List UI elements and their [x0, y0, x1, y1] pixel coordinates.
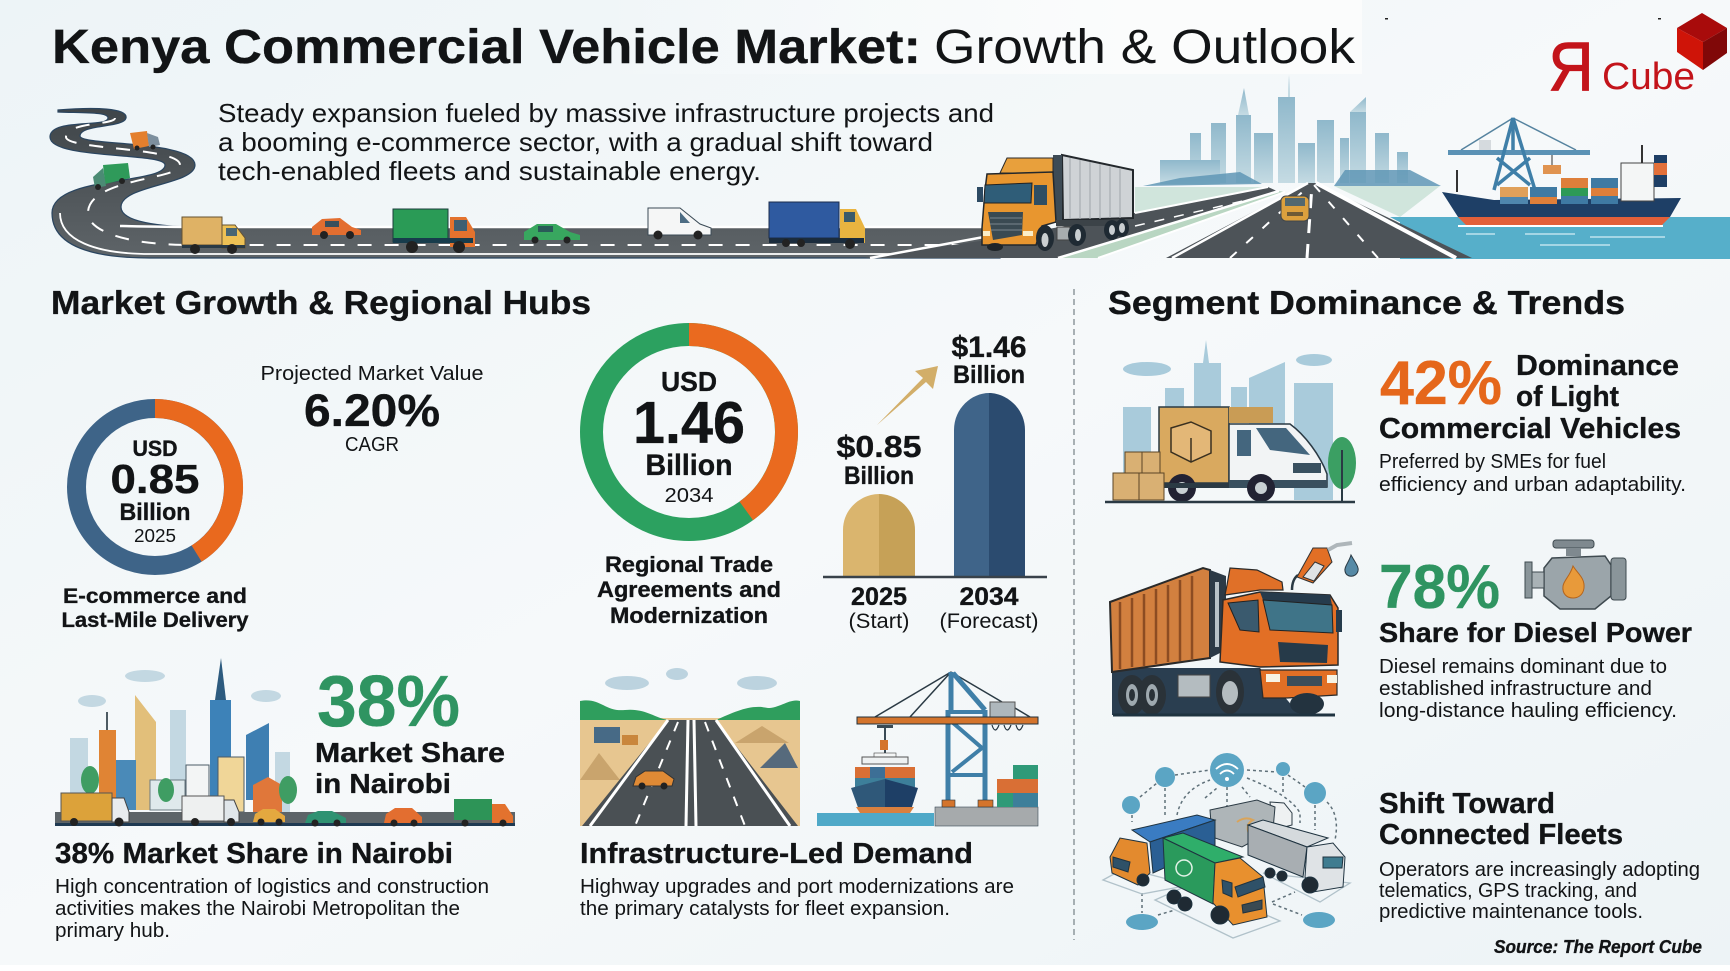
stat: 6.20% CAGR: 6.20%: [304, 385, 440, 436]
bar chart: 2025 vs 2034: (Forecast): [940, 610, 1038, 633]
label: Regional trade driver: Regional Trade: [605, 552, 773, 577]
stat: 78% diesel power: long-distance hauling efficiency.: [1379, 700, 1677, 722]
heading: Segment Dominance & Trends: Segment Dominance & Trends: [1108, 284, 1625, 321]
bar chart: 2025 vs 2034: (Start): [848, 610, 910, 633]
icon: diesel truck with fuel nozzle: [1110, 543, 1358, 715]
vehicle: green truck: [393, 209, 475, 253]
bar chart: 2025 vs 2034: 2034: [960, 583, 1019, 611]
stat: 42% light commercial vehicles: 42%: [1380, 349, 1502, 418]
left winding road: [50, 109, 1000, 258]
small yellow car: [1281, 196, 1309, 221]
label: E-commerce driver: [62, 585, 249, 632]
heading: Market Growth & Regional Hubs: Market Growth & Regional Hubs: [51, 284, 591, 321]
stat: 38% market share in Nairobi: 38%: [317, 662, 460, 742]
text block: Infrastructure-led demand: Infrastructure-Led Demand: [580, 838, 973, 870]
text block: connected fleets: [1379, 788, 1700, 923]
text block: Nairobi hub: 38% Market Share in Nairobi: [55, 838, 453, 870]
vehicle: tan box truck: [182, 217, 245, 254]
bar chart: 2025 vs 2034: $1.46: [952, 331, 1026, 364]
text block: Nairobi hub: High concentration of logistics and construction: [55, 876, 489, 898]
text block: Infrastructure-led demand: the primary catalysts for fleet expansion.: [580, 898, 950, 920]
donut: USD 0.85 Billion 2025: [76, 408, 234, 566]
subtitle text: a booming e-commerce sector, with a gradual shift toward: [218, 127, 933, 157]
vehicle: white van: [648, 208, 711, 240]
stat: 42% light commercial vehicles: efficiency and urban adaptability.: [1379, 474, 1686, 496]
cargo ship and crane: [1442, 118, 1681, 227]
donut: USD 1.46 Billion 2034: 2034: [664, 485, 714, 507]
stat: 42% light commercial vehicles: Dominance: [1516, 350, 1679, 382]
title: Kenya Commercial Vehicle Market:: [52, 21, 921, 74]
text block: Infrastructure-led demand: Highway upgrades and port modernizations are: [580, 876, 1014, 898]
stat: 38% market share in Nairobi: [315, 662, 505, 799]
skyline: [1143, 75, 1441, 186]
subtitle text: Steady expansion fueled by massive infrastructure projects and: [218, 98, 994, 128]
stat: 78% diesel power: Share for Diesel Power: [1379, 617, 1692, 648]
stat: 6.20% CAGR: Projected Market Value: [260, 363, 484, 385]
icon: engine with flame: [1525, 540, 1626, 609]
text block: connected fleets: telematics, GPS tracking, and: [1379, 880, 1637, 902]
label: E-commerce driver: E-commerce and: [63, 585, 247, 608]
label: Regional trade driver: Modernization: [610, 603, 768, 628]
stat: 78% diesel power: [1379, 553, 1692, 722]
ship wave lines: [1466, 234, 1665, 245]
arrow: growth: [877, 366, 938, 425]
text block: Nairobi hub: [55, 838, 489, 942]
donut: USD 1.46 Billion 2034: Billion: [646, 449, 732, 482]
stat: 42% light commercial vehicles: Commercial Vehicles: [1379, 413, 1681, 445]
label: Regional trade driver: [597, 552, 781, 628]
right highways: [865, 183, 1472, 258]
text block: Nairobi hub: primary hub.: [55, 920, 170, 942]
label: E-commerce driver: Last-Mile Delivery: [62, 609, 249, 632]
label: Regional trade driver: Agreements and: [597, 577, 781, 602]
vehicle: orange car: [312, 218, 361, 239]
back silver truck: [1210, 800, 1292, 847]
green truck: [1163, 833, 1267, 925]
banner: road, vehicles, skyline and port: [50, 75, 1730, 259]
donut: USD 0.85 Billion 2025: USD: [132, 436, 178, 461]
stat: 38% market share in Nairobi: Market Share: [315, 737, 505, 768]
bar chart: 2025 vs 2034: Billion: [844, 462, 914, 490]
icon: connected fleet: [1103, 753, 1350, 938]
stat: 78% diesel power: 78%: [1379, 553, 1500, 622]
donut: USD 1.46 Billion 2034: 1.46: [633, 390, 745, 456]
donut: USD 0.85 Billion 2025: Billion: [120, 499, 190, 526]
donut: USD 1.46 Billion 2034: USD: [661, 366, 717, 397]
vehicle: road orange truck: [130, 131, 160, 150]
icon: highway construction: [580, 668, 800, 826]
vehicle: green car: [524, 224, 580, 244]
bar chart: 2025 vs 2034: $0.85: [836, 429, 922, 464]
title: [52, 21, 1356, 74]
logo: RCube: Я: [1548, 28, 1594, 105]
text block: connected fleets: predictive maintenance tools.: [1379, 901, 1643, 923]
bar chart: 2025 vs 2034: 2025: [851, 583, 907, 611]
logo: RCube: Cube: [1602, 56, 1695, 98]
text block: connected fleets: Operators are increasingly adopting: [1379, 859, 1700, 881]
title: Growth & Outlook: [934, 21, 1356, 74]
text block: connected fleets: Connected Fleets: [1379, 819, 1623, 851]
icon: Nairobi city and traffic: [55, 658, 515, 826]
donut: USD 0.85 Billion 2025: 2025: [134, 526, 176, 546]
text block: Nairobi hub: activities makes the Nairobi Metropolitan the: [55, 898, 460, 920]
silver front truck: [1248, 820, 1345, 893]
bar chart: 2025 vs 2034: Billion: [953, 361, 1025, 389]
stat: 6.20% CAGR: CAGR: [345, 434, 399, 456]
icon: light commercial vehicle: [1105, 340, 1356, 502]
subtitle text: tech-enabled fleets and sustainable energy.: [218, 156, 761, 186]
stat: 38% market share in Nairobi: in Nairobi: [315, 768, 451, 799]
icon: port crane and ship: [817, 672, 1038, 826]
stat: 42% light commercial vehicles: of Light: [1516, 381, 1619, 413]
donut: USD 0.85 Billion 2025: 0.85: [110, 456, 200, 502]
text block: Infrastructure-led demand: [580, 838, 1014, 920]
bar chart: 2025 vs 2034: [823, 331, 1047, 633]
donut: USD 1.46 Billion 2034: [592, 334, 787, 530]
text block: connected fleets: Shift Toward: [1379, 788, 1555, 820]
stat: 78% diesel power: Diesel remains dominant due to: [1379, 656, 1667, 678]
stat: 6.20% CAGR: [260, 363, 484, 456]
vehicle: blue truck: [769, 202, 865, 249]
vehicle: road green van: [93, 163, 130, 190]
stat: 78% diesel power: established infrastructure and: [1379, 678, 1652, 700]
sea: [1400, 217, 1730, 259]
source note: Source: The Report Cube: [1494, 937, 1702, 957]
stat: 42% light commercial vehicles: Preferred by SMEs for fuel: [1379, 451, 1606, 473]
stat: 42% light commercial vehicles: [1379, 349, 1686, 496]
icon: fuel nozzle: [1292, 543, 1358, 590]
blue truck: [1110, 815, 1215, 886]
subtitle text: [218, 98, 994, 186]
logo: RCube: [1548, 13, 1727, 105]
vehicle: big orange truck: [977, 155, 1133, 251]
